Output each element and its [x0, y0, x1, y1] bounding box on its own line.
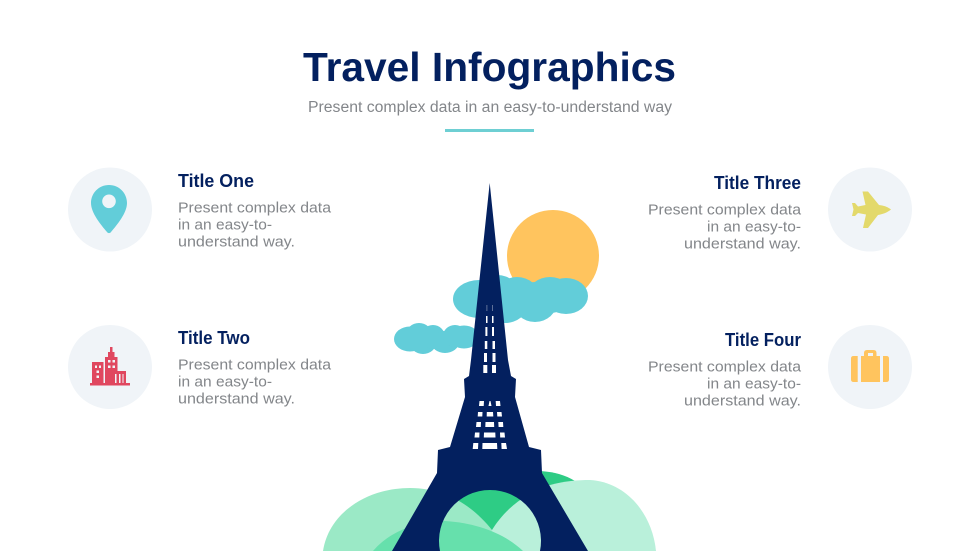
heading: title three: Title Three	[714, 172, 801, 193]
panel: title two	[68, 325, 332, 409]
text: title two body: in an easy-to-	[178, 374, 272, 390]
text: title three body: Present complex data	[648, 202, 802, 218]
text: title four body: Present complex data	[648, 358, 802, 376]
hills	[323, 471, 656, 551]
text: title one body: in an easy-to-	[178, 216, 272, 234]
cloud: large	[453, 275, 588, 323]
icon: city buildings	[90, 347, 130, 386]
icon: airplane	[852, 192, 891, 228]
spire windows	[483, 305, 496, 373]
title: Travel Infographics	[303, 44, 676, 90]
panel: title one	[68, 168, 332, 252]
icon: suitcase	[851, 350, 889, 382]
text: title four body	[648, 358, 802, 410]
text: title two body	[178, 356, 332, 408]
text: title one body: Present complex data	[178, 200, 332, 216]
title underline	[445, 129, 534, 132]
text: title two body: understand way.	[178, 390, 295, 408]
text: title four body: in an easy-to-	[707, 376, 801, 392]
sun	[507, 210, 599, 302]
text: title one body	[178, 200, 332, 250]
text: title two body: Present complex data	[178, 356, 332, 374]
heading: title two: Title Two	[178, 327, 250, 348]
text: title one body: understand way.	[178, 234, 295, 250]
panel: title three	[648, 168, 912, 252]
text: title three body	[648, 202, 802, 252]
panel: title four	[648, 325, 912, 410]
heading: title one: Title One	[178, 170, 254, 191]
lower windows	[473, 401, 507, 449]
text: title four body: understand way.	[684, 392, 801, 410]
cloud: small	[394, 323, 479, 354]
eiffel tower	[392, 183, 588, 551]
icon: location pin	[91, 185, 127, 233]
subtitle: Present complex data in an easy-to-understand way	[308, 99, 672, 116]
text: title three body: in an easy-to-	[707, 218, 801, 236]
heading: title four: Title Four	[725, 329, 801, 350]
text: title three body: understand way.	[684, 236, 801, 252]
